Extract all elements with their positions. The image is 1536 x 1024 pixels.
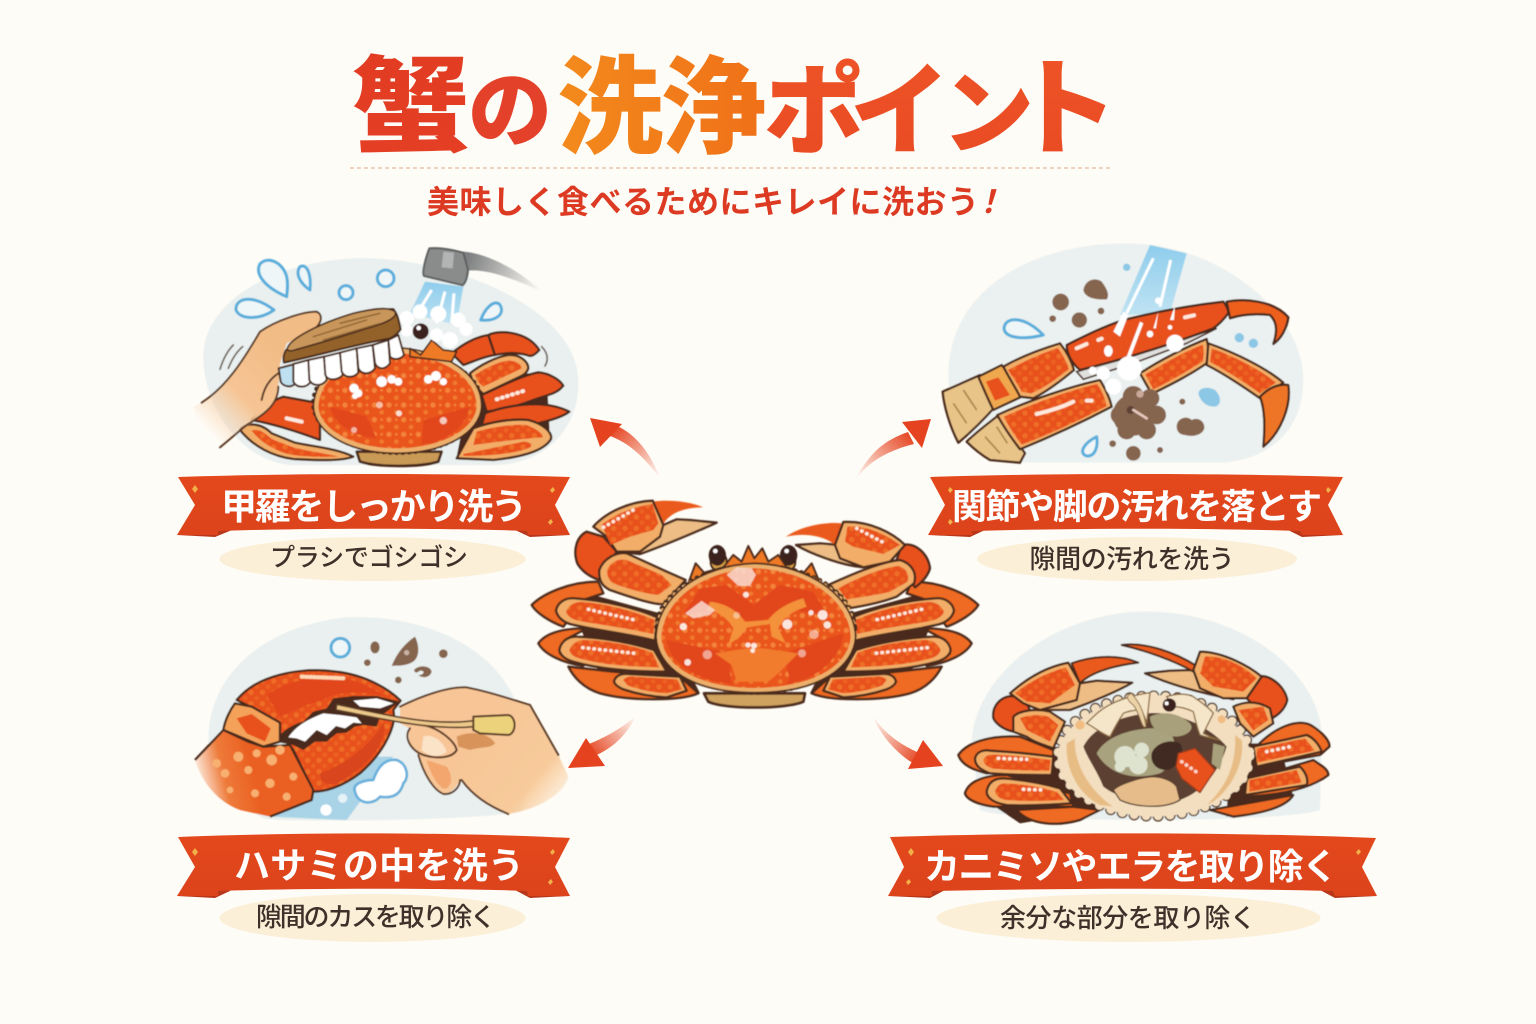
- banner: claws heading: ハサミの中を洗う: [234, 845, 524, 886]
- pill: innards caption: 余分な部分を取り除く: [1000, 903, 1256, 933]
- arrow: center crab to leg panel: [855, 419, 931, 480]
- crab body: [313, 340, 482, 466]
- arrow: center crab to claw panel: [568, 716, 636, 768]
- foam splash: [1089, 297, 1184, 395]
- dirt clump: [1111, 386, 1166, 439]
- banner: shell heading: 甲羅をしっかり洗う: [221, 486, 527, 527]
- hand: [193, 312, 321, 447]
- banner: joints heading: [928, 474, 1343, 537]
- illustration: cleaning the claw with a swab: [195, 617, 568, 821]
- shell highlights: [680, 567, 831, 666]
- carapace: [656, 546, 856, 693]
- swab: [336, 704, 515, 735]
- title: ン: [942, 64, 1034, 166]
- title: ト: [1012, 51, 1118, 169]
- shell: [1058, 693, 1251, 817]
- panel: remove the innards: [888, 612, 1377, 942]
- hand: [400, 687, 568, 814]
- legs left: [532, 582, 700, 699]
- pill: shell caption: プラシでゴシゴシ: [270, 544, 468, 572]
- brush: [279, 309, 404, 387]
- upper leg: [943, 300, 1288, 443]
- title: の: [468, 64, 552, 158]
- pill: claws caption: [220, 894, 526, 942]
- subtitle: ！: [972, 184, 1004, 220]
- dirt specks: [1049, 279, 1204, 461]
- title: 浄: [660, 50, 766, 168]
- shell underside: [704, 693, 805, 707]
- water stream: [1120, 245, 1187, 315]
- pill: joints caption: [977, 537, 1297, 581]
- panel: joints and legs: [928, 243, 1343, 581]
- illustration: rinsing crab legs: [943, 243, 1303, 463]
- left claw: [993, 657, 1138, 748]
- title: 蟹: [352, 50, 470, 166]
- panel: inside the claws: [177, 617, 570, 942]
- arrow: center crab to shell panel: [590, 418, 660, 478]
- faucet: [423, 248, 543, 293]
- innards: [1083, 713, 1227, 803]
- right claw: [1122, 644, 1287, 737]
- title: イ: [850, 56, 950, 168]
- arrow: center crab to open crab panel: [872, 715, 943, 769]
- banner: innards heading: カニミソやエラを取り除く: [924, 846, 1338, 887]
- banner: shell heading: [177, 474, 570, 537]
- water drops: [236, 260, 502, 320]
- lower leg: [967, 339, 1289, 463]
- drops: [1004, 264, 1258, 456]
- illustration: brushing the shell under a tap: [193, 248, 578, 466]
- arm: [195, 730, 313, 817]
- left claw arm: [575, 501, 717, 604]
- banner: claws heading: [177, 833, 570, 898]
- banner: joints heading: 関節や脚の汚れを落とす: [952, 488, 1322, 527]
- water stream: [410, 282, 463, 325]
- eyes: [709, 545, 797, 571]
- panel: wash the shell: [177, 248, 578, 581]
- debris and bubble: [331, 637, 448, 683]
- carpus: [223, 703, 280, 747]
- foam: [270, 757, 407, 820]
- banner: innards heading: [888, 833, 1377, 898]
- title: [352, 50, 1118, 169]
- center crab illustration: [532, 501, 978, 707]
- inner gap: [275, 696, 400, 750]
- crab legs: [240, 332, 569, 460]
- right legs: [1210, 723, 1329, 817]
- left legs: [958, 736, 1100, 824]
- subtitle: 美味しく食べるためにキレイに洗おう: [427, 184, 979, 220]
- legs right: [810, 582, 978, 699]
- claw: [195, 670, 401, 817]
- pill: innards caption: [936, 894, 1320, 942]
- illustration: opened crab: [958, 612, 1329, 824]
- foam and eye: [399, 304, 473, 348]
- pill: claws caption: 隙間のカスを取り除く: [256, 902, 496, 932]
- pill: shell caption: [220, 537, 526, 581]
- title: 洗: [557, 50, 663, 168]
- soap bubbles on shell: [349, 371, 447, 433]
- pill: joints caption: 隙間の汚れを洗う: [1030, 544, 1234, 574]
- right claw arm: [786, 522, 930, 608]
- motion lines: [220, 345, 547, 369]
- title: ポ: [764, 56, 864, 168]
